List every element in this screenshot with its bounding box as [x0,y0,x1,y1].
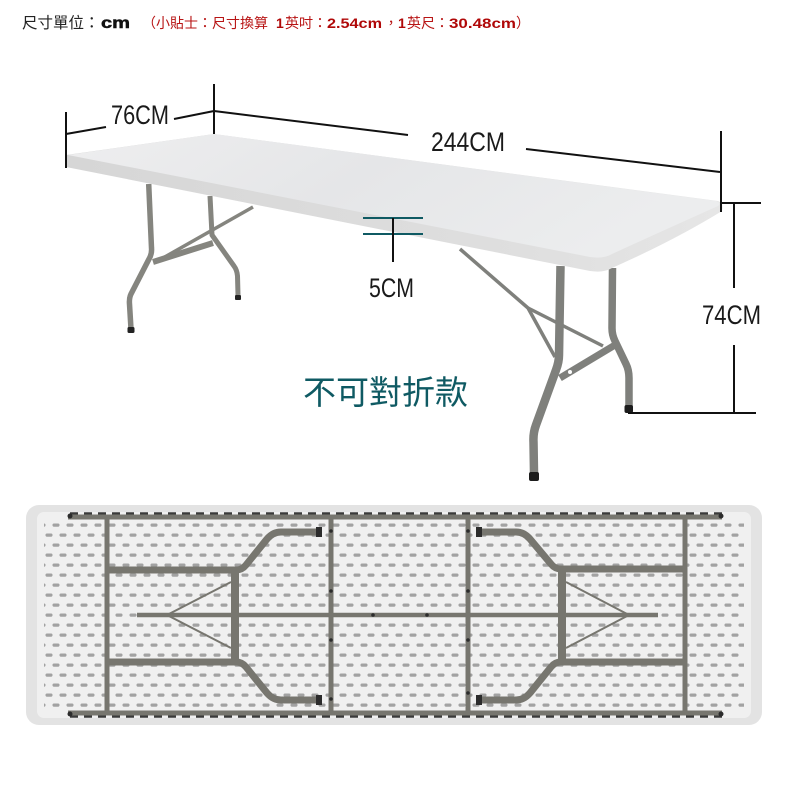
table top [66,134,722,272]
conversion tip [142,15,530,31]
dimension: 74CM: 74CM [702,300,761,330]
conversion tip: 30.48cm [449,15,516,31]
dimension: 76CM: 76CM [111,100,169,130]
left leg folded [107,532,320,700]
scalloped rail edges [70,514,722,716]
dimension: 74CM [628,203,761,413]
dimension: 5CM thickness [363,218,423,303]
conversion tip: 2.54cm [327,15,382,31]
centre rod [137,613,658,617]
conversion tip: ） [516,15,530,31]
right leg folded [476,532,685,700]
table underside photo [26,505,762,725]
heading: unit note [22,14,530,32]
rubber feet and rivets [68,514,724,716]
dimension: 244CM [214,111,721,212]
conversion tip: 1 [398,15,406,31]
left legs [128,184,253,333]
right legs [460,249,633,481]
conversion tip: （小貼士：尺寸換算 [142,15,268,31]
dimension: 244CM: 244CM [431,127,505,157]
conversion tip: 1 [276,15,284,31]
v braces [167,582,629,648]
tabletop underside [26,505,762,725]
table photo: side view [66,134,722,481]
hole pattern [44,520,744,710]
title: non-folding model: 不可對折款 [303,366,468,414]
conversion tip: 英吋： [285,15,327,31]
steel frame [68,517,722,713]
unit value: cm [101,15,130,32]
conversion tip: 英尺： [407,15,449,31]
cross bars [107,517,685,713]
dimension: 5CM thickness: 5CM [369,273,414,303]
dimension: 76CM [66,84,214,168]
side rails [68,517,722,713]
conversion tip: ， [384,15,398,31]
unit label: 尺寸單位： [22,14,100,32]
